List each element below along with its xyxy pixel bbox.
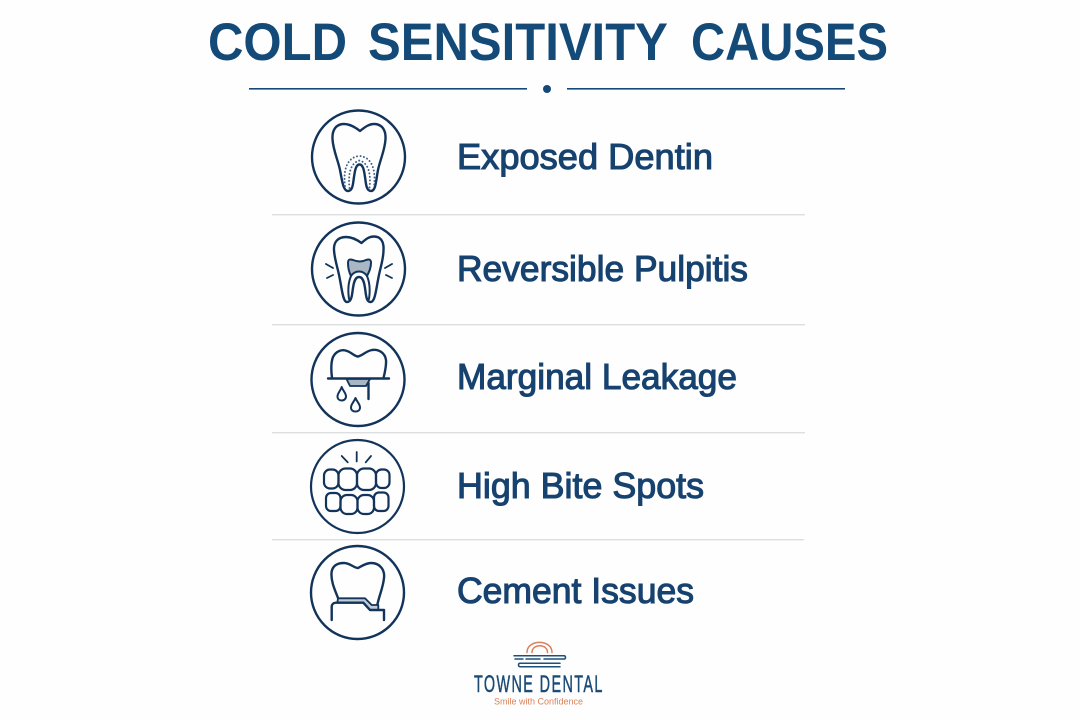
- row: Cement Issues: [311, 546, 694, 639]
- title divider: [249, 85, 845, 93]
- icon: upper and lower teeth: [311, 440, 404, 533]
- icon: crown on cement layer: [311, 546, 404, 639]
- row: Reversible Pulpitis: [312, 222, 748, 316]
- row: High Bite Spots: [311, 440, 704, 533]
- label: Marginal Leakage: [457, 356, 737, 397]
- title: COLD: [208, 13, 347, 72]
- icon: crown with leaking margin: [312, 333, 404, 426]
- row: Marginal Leakage: [312, 333, 737, 426]
- logo icon: sun over waves: [514, 642, 566, 667]
- label: Reversible Pulpitis: [457, 248, 748, 289]
- row: Exposed Dentin: [312, 110, 713, 204]
- icon: tooth with exposed dentin: [312, 110, 405, 204]
- tagline: Smile with Confidence: [494, 696, 583, 706]
- label: Exposed Dentin: [457, 136, 713, 177]
- icon: tooth with inflamed pulp: [312, 222, 405, 316]
- title: SENSITIVITY: [368, 13, 668, 72]
- title: CAUSES: [691, 13, 888, 72]
- label: Cement Issues: [457, 570, 694, 611]
- logo: Towne Dental: [474, 642, 602, 706]
- label: High Bite Spots: [457, 465, 704, 506]
- brand name: TOWNE DENTAL: [474, 671, 602, 698]
